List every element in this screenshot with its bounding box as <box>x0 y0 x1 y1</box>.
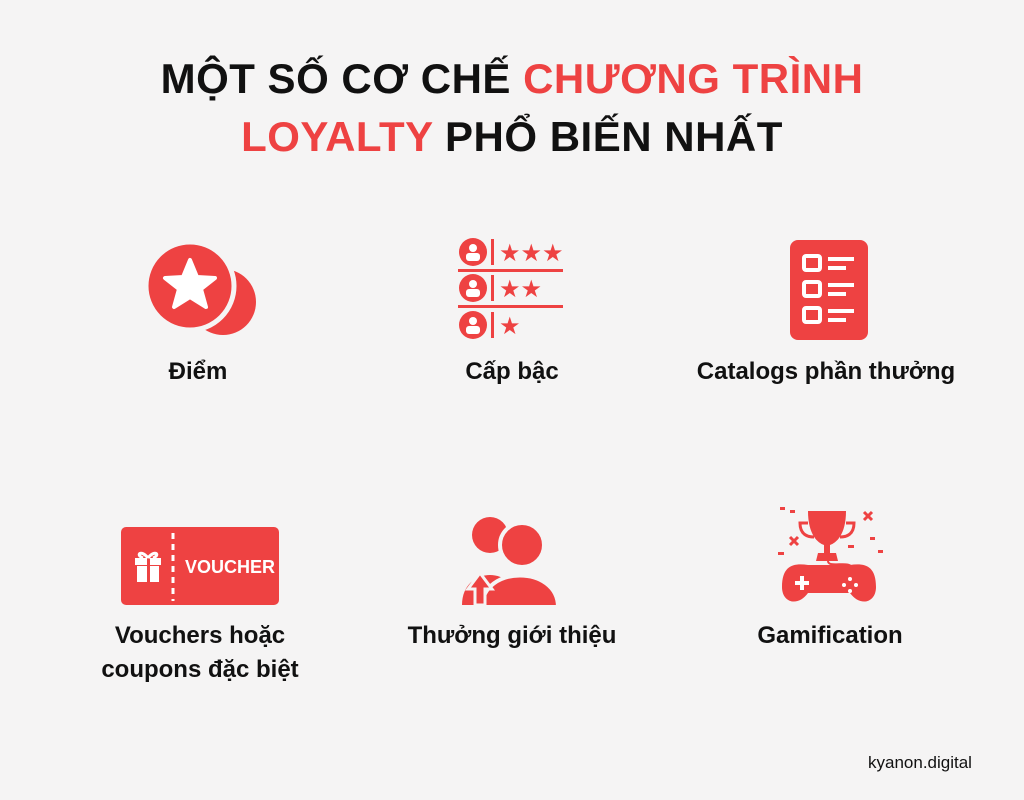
label: Điểm: Điểm <box>169 358 227 385</box>
label: Catalogs: Catalogs phần thưởng <box>697 358 955 385</box>
icon: referral people <box>462 517 556 605</box>
icon: tiers: ★ <box>499 312 521 340</box>
title: MỘT SỐ CƠ CHẾ CHƯƠNG TRÌNH <box>161 55 863 102</box>
icon: catalog <box>790 240 868 340</box>
label: Vouchers <box>101 622 299 683</box>
label: Cấp bậc: Cấp bậc <box>465 358 559 385</box>
label: Gamification: Gamification <box>757 622 903 649</box>
icon: voucher: VOUCHER <box>185 557 275 577</box>
icon: tiers: ★★★ <box>499 239 564 267</box>
icon: tiers <box>458 238 564 340</box>
label: Thưởng giới thiệu: Thưởng giới thiệu <box>408 622 616 649</box>
label: Vouchers: coupons đặc biệt <box>101 656 299 683</box>
title <box>161 55 863 160</box>
icon: voucher <box>121 527 279 605</box>
label: Vouchers: Vouchers hoặc <box>115 622 285 649</box>
footer brand: kyanon.digital <box>868 753 972 772</box>
title: LOYALTY PHỔ BIẾN NHẤT <box>241 113 783 160</box>
icon: tiers: ★★ <box>499 275 542 303</box>
icon: gamification <box>778 507 883 602</box>
icon: points coins <box>148 244 256 335</box>
